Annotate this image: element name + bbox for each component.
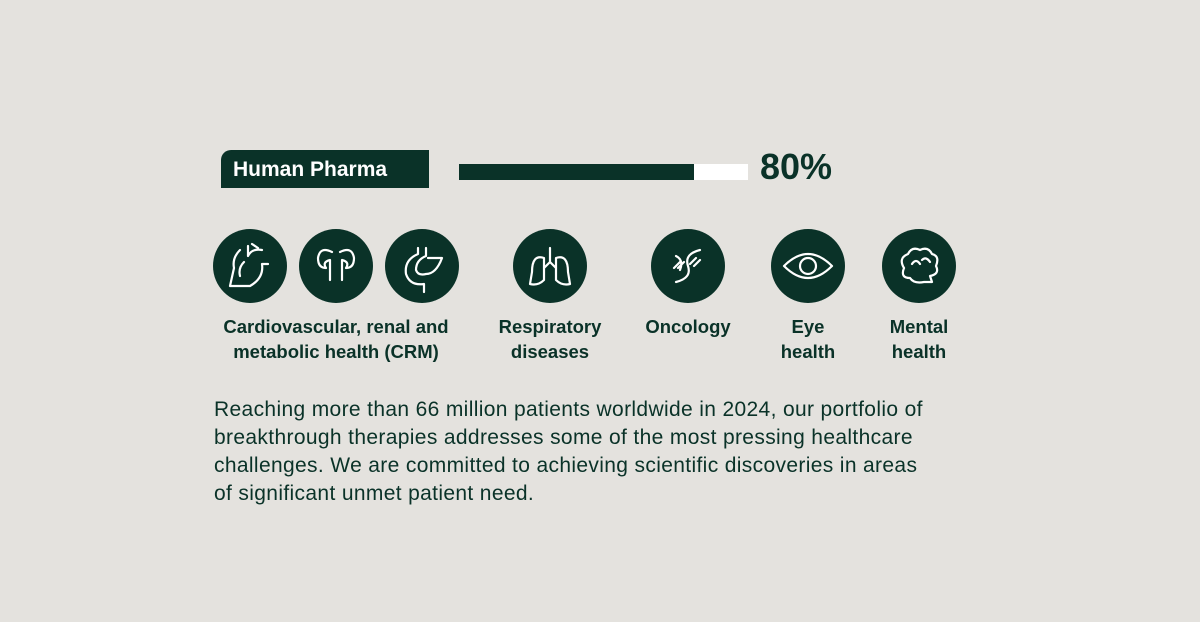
icon: stomach xyxy=(385,229,459,303)
label: oncology: Oncology xyxy=(645,316,731,337)
progress bar 80% xyxy=(459,164,748,180)
label: mental health xyxy=(890,316,948,362)
paragraph: of significant unmet patient need. xyxy=(214,482,534,505)
label: CRM: metabolic health (CRM) xyxy=(233,341,439,362)
icon: eye xyxy=(771,229,845,303)
label: respiratory: diseases xyxy=(511,341,589,362)
tag: Human Pharma: Human Pharma xyxy=(233,158,387,181)
paragraph: Reaching more than 66 million patients worldwide in 2024, our portfolio of xyxy=(214,398,923,421)
icon: kidneys xyxy=(299,229,373,303)
label: eye health xyxy=(781,316,835,362)
label: eye health: Eye xyxy=(792,316,824,337)
icon: heart xyxy=(213,229,287,303)
label: respiratory: Respiratory xyxy=(499,316,601,337)
paragraph xyxy=(214,398,923,505)
label: mental health: health xyxy=(892,341,946,362)
label: mental health: Mental xyxy=(890,316,948,337)
label: eye health: health xyxy=(781,341,835,362)
label: CRM: Cardiovascular, renal and xyxy=(223,316,449,337)
percentage: 80% xyxy=(760,146,832,187)
paragraph: breakthrough therapies addresses some of the most pressing healthcare xyxy=(214,426,913,449)
icon: DNA xyxy=(651,229,725,303)
label: respiratory xyxy=(499,316,602,362)
tag: Human Pharma xyxy=(221,150,429,188)
icon: brain xyxy=(882,229,956,303)
label: CRM xyxy=(223,316,449,362)
icon: lungs xyxy=(513,229,587,303)
paragraph: challenges. We are committed to achieving scientific discoveries in areas xyxy=(214,454,917,477)
